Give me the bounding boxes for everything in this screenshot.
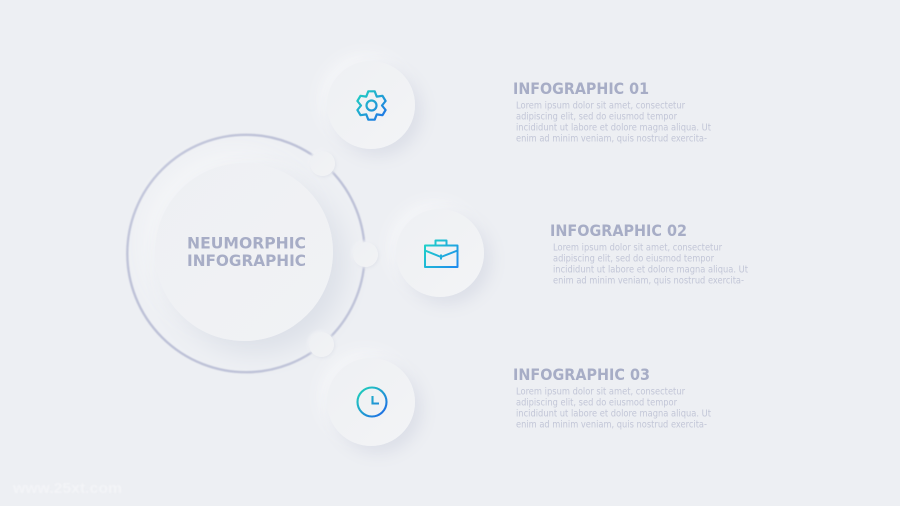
central neumorphic circle bbox=[155, 163, 333, 341]
text block 03 bbox=[513, 365, 711, 430]
text block 02: INFOGRAPHIC 02 bbox=[550, 221, 687, 240]
text block 02: adipiscing elit, sed do eiusmod tempor bbox=[553, 254, 714, 264]
text block 01: INFOGRAPHIC 01 bbox=[513, 79, 649, 98]
text block 02: incididunt ut labore et dolore magna aliqua. Ut bbox=[553, 264, 748, 276]
watermark: www.25xt.com bbox=[12, 481, 122, 497]
button: gear bbox=[327, 61, 415, 149]
text block 02: Lorem ipsum dolor sit amet, consectetur bbox=[553, 242, 722, 254]
text block 03: INFOGRAPHIC 03 bbox=[513, 365, 650, 384]
text block 02: enim ad minim veniam, quis nostrud exercita- bbox=[553, 276, 744, 286]
icon: clock bbox=[358, 388, 386, 416]
ring connector dot 3 bbox=[309, 332, 334, 356]
text block 03: Lorem ipsum dolor sit amet, consectetur bbox=[516, 386, 685, 398]
text block 03: enim ad minim veniam, quis nostrud exercita- bbox=[516, 420, 707, 430]
icon: briefcase bbox=[425, 240, 458, 267]
ring connector dot 2 bbox=[353, 242, 378, 266]
button: clock bbox=[327, 358, 415, 446]
central title: INFOGRAPHIC bbox=[187, 251, 306, 270]
central title bbox=[187, 234, 306, 270]
button: briefcase bbox=[396, 209, 484, 297]
central title: NEUMORPHIC bbox=[187, 234, 306, 252]
text block 01: adipiscing elit, sed do eiusmod tempor bbox=[516, 112, 677, 122]
ring connector dot 1 bbox=[310, 150, 334, 176]
icon: gear bbox=[357, 91, 386, 120]
text block 01: incididunt ut labore et dolore magna aliqua. Ut bbox=[516, 122, 711, 134]
text block 01 bbox=[513, 79, 711, 144]
text block 01: Lorem ipsum dolor sit amet, consectetur bbox=[516, 100, 685, 112]
text block 01: enim ad minim veniam, quis nostrud exercita- bbox=[516, 134, 707, 144]
text block 03: incididunt ut labore et dolore magna aliqua. Ut bbox=[516, 408, 711, 420]
text block 03: adipiscing elit, sed do eiusmod tempor bbox=[516, 398, 677, 408]
text block 02 bbox=[550, 221, 748, 286]
